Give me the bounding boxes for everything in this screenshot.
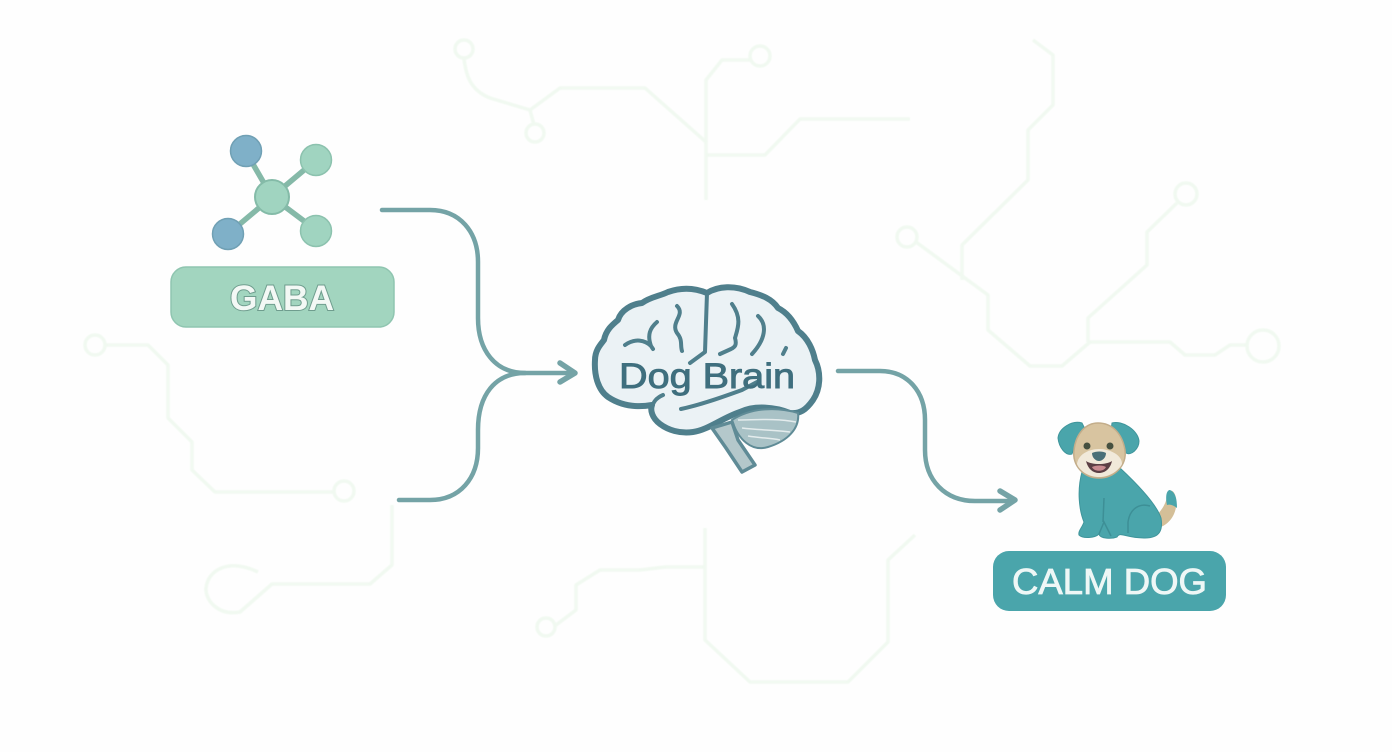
body bbox=[1079, 468, 1162, 538]
brain stem bbox=[712, 422, 755, 472]
label: Dog Brain: Dog Brain bbox=[619, 357, 795, 396]
arrow: brain to calm dog bbox=[838, 371, 1015, 510]
icon: dog brain bbox=[595, 287, 819, 472]
label: CALM DOG: CALM DOG bbox=[1012, 561, 1207, 602]
tail bbox=[1155, 491, 1176, 528]
brain outline bbox=[595, 287, 819, 433]
icon: calm dog bbox=[1058, 422, 1177, 538]
mouth bbox=[1086, 461, 1112, 473]
label: CALM DOG bbox=[993, 551, 1226, 611]
label: GABA: GABA bbox=[230, 279, 334, 318]
ears bbox=[1058, 422, 1086, 454]
cerebellum bbox=[732, 409, 798, 448]
cerebellum folds and sulci bbox=[625, 293, 786, 409]
arrow: second input to brain bbox=[399, 363, 575, 500]
head bbox=[1074, 423, 1125, 478]
arrow: GABA to brain bbox=[382, 210, 525, 373]
icon: GABA molecule bbox=[212, 136, 332, 250]
eyes and nose bbox=[1084, 442, 1090, 450]
background circuit pattern bbox=[85, 40, 1279, 682]
label: GABA bbox=[171, 267, 394, 327]
